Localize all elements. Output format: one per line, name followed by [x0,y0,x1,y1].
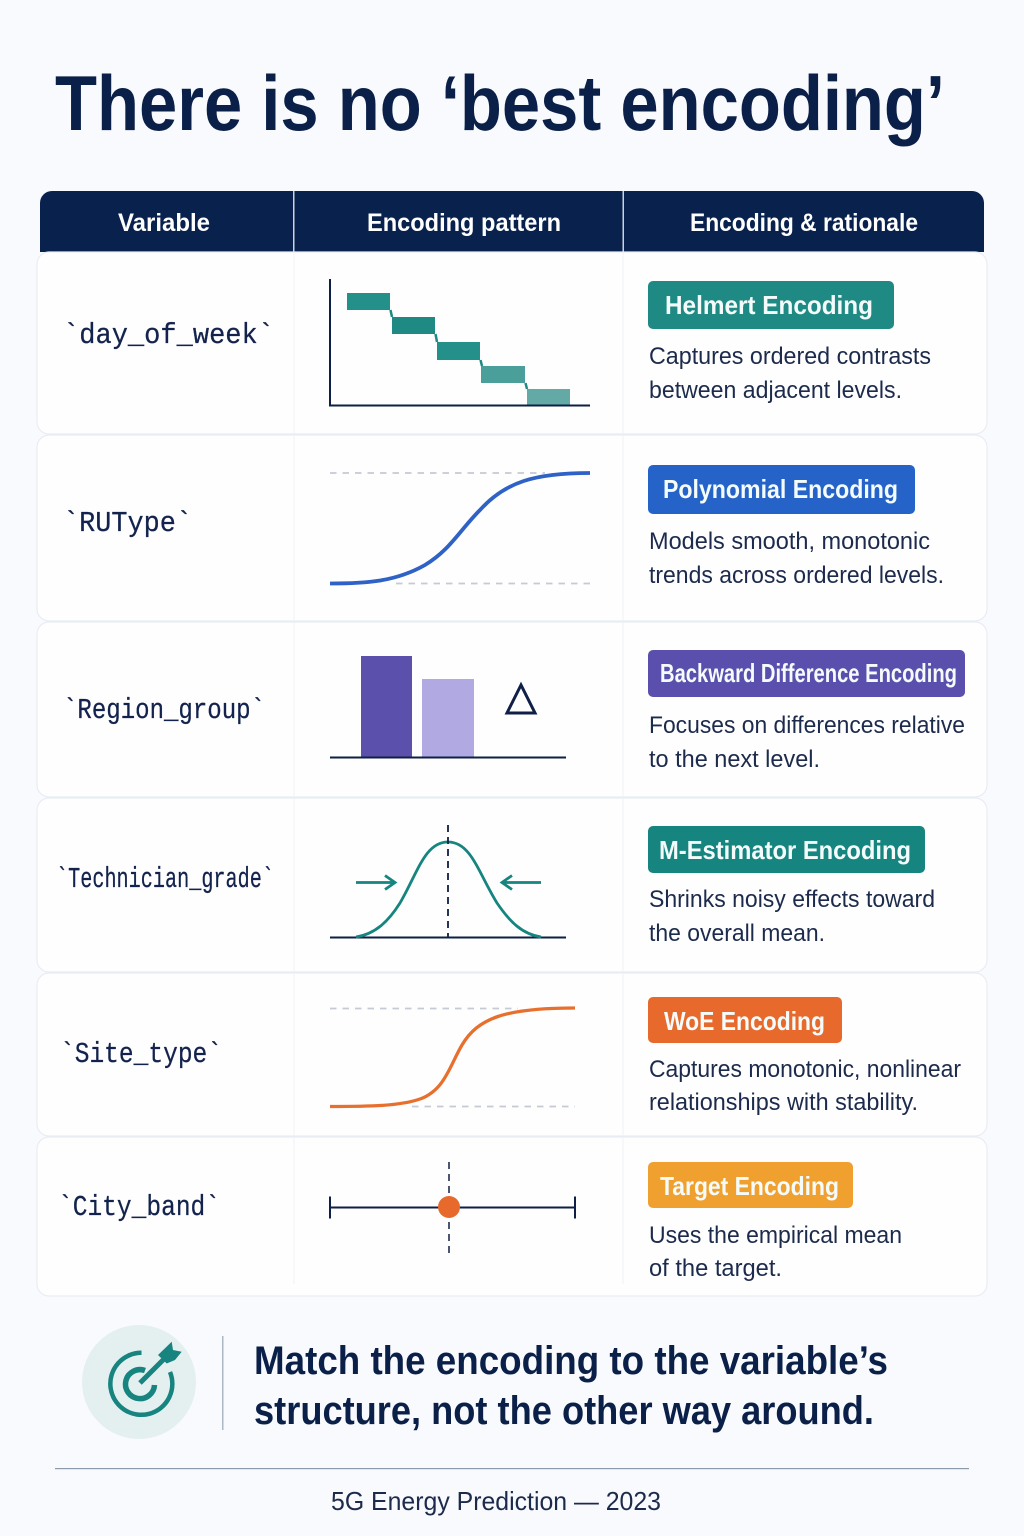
badge: Target Encoding: Target Encoding [660,1171,839,1201]
arrow: right pointing [356,876,395,890]
badge: Helmert Encoding [648,281,894,329]
row: Site_type [37,973,987,1136]
rationale text [649,528,944,589]
badge: Target Encoding [648,1162,853,1208]
icon: target with arrow [82,1325,196,1439]
badge: Backward Difference Encoding [648,650,965,697]
variable name: `Site_type` [60,1038,222,1071]
rationale text [649,886,935,947]
row: City_band [37,1137,987,1296]
chart: target mean dot [330,1162,575,1254]
rationale text [649,1222,902,1282]
variable name: `Technician_grade` [56,863,274,896]
rationale text: between adjacent levels. [649,377,902,404]
rationale text: Focuses on differences relative [649,712,965,739]
row: Technician_grade [37,798,987,972]
rationale text: Models smooth, monotonic [649,528,930,555]
rationale text: Captures monotonic, nonlinear [649,1056,961,1083]
variable name: `RUType` [63,507,192,540]
badge: WoE Encoding: WoE Encoding [664,1006,825,1036]
icon: delta [507,685,535,713]
rationale text [649,712,965,773]
rationale text: the overall mean. [649,920,825,947]
row: RUType [37,435,987,621]
rationale text: relationships with stability. [649,1089,918,1116]
variable name: `Region_group` [63,694,265,727]
rationale text: Uses the empirical mean [649,1222,902,1249]
rationale text: trends across ordered levels. [649,562,944,589]
badge: M-Estimator Encoding [648,826,925,873]
rationale text: to the next level. [649,746,820,773]
variable name: `day_of_week` [63,319,274,352]
variable name: `City_band` [58,1191,220,1224]
row: day_of_week [37,252,987,434]
footer text: 5G Energy Prediction — 2023 [331,1486,661,1516]
chart: backward difference bars [330,656,566,758]
rationale text: Shrinks noisy effects toward [649,886,935,913]
chart: Helmert staircase [330,279,590,406]
badge: Polynomial Encoding: Polynomial Encoding [663,474,898,504]
divider: takeaway [222,1336,224,1430]
rationale text [649,1056,961,1116]
arrow: left pointing [502,876,541,890]
badge: Helmert Encoding: Helmert Encoding [665,290,873,320]
header: Encoding & rationale: Encoding & rationale [690,209,918,237]
badge: M-Estimator Encoding: M-Estimator Encoding [659,835,911,865]
badge: WoE Encoding [648,997,842,1043]
chart: shrinkage bell curve [330,825,566,938]
row: Region_group [37,622,987,797]
chart: WoE curve [330,1008,575,1106]
takeaway text [254,1339,888,1433]
badge: Polynomial Encoding [648,465,915,514]
table header [40,191,984,252]
rationale text: of the target. [649,1255,782,1282]
header: Variable: Variable [118,209,210,237]
footer rule [55,1468,969,1469]
header: Encoding pattern: Encoding pattern [367,209,561,237]
takeaway text: Match the encoding to the variable’s [254,1339,888,1383]
chart: polynomial curve [330,473,590,584]
takeaway text: structure, not the other way around. [254,1389,874,1433]
rationale text [649,343,931,404]
rationale text: Captures ordered contrasts [649,343,931,370]
